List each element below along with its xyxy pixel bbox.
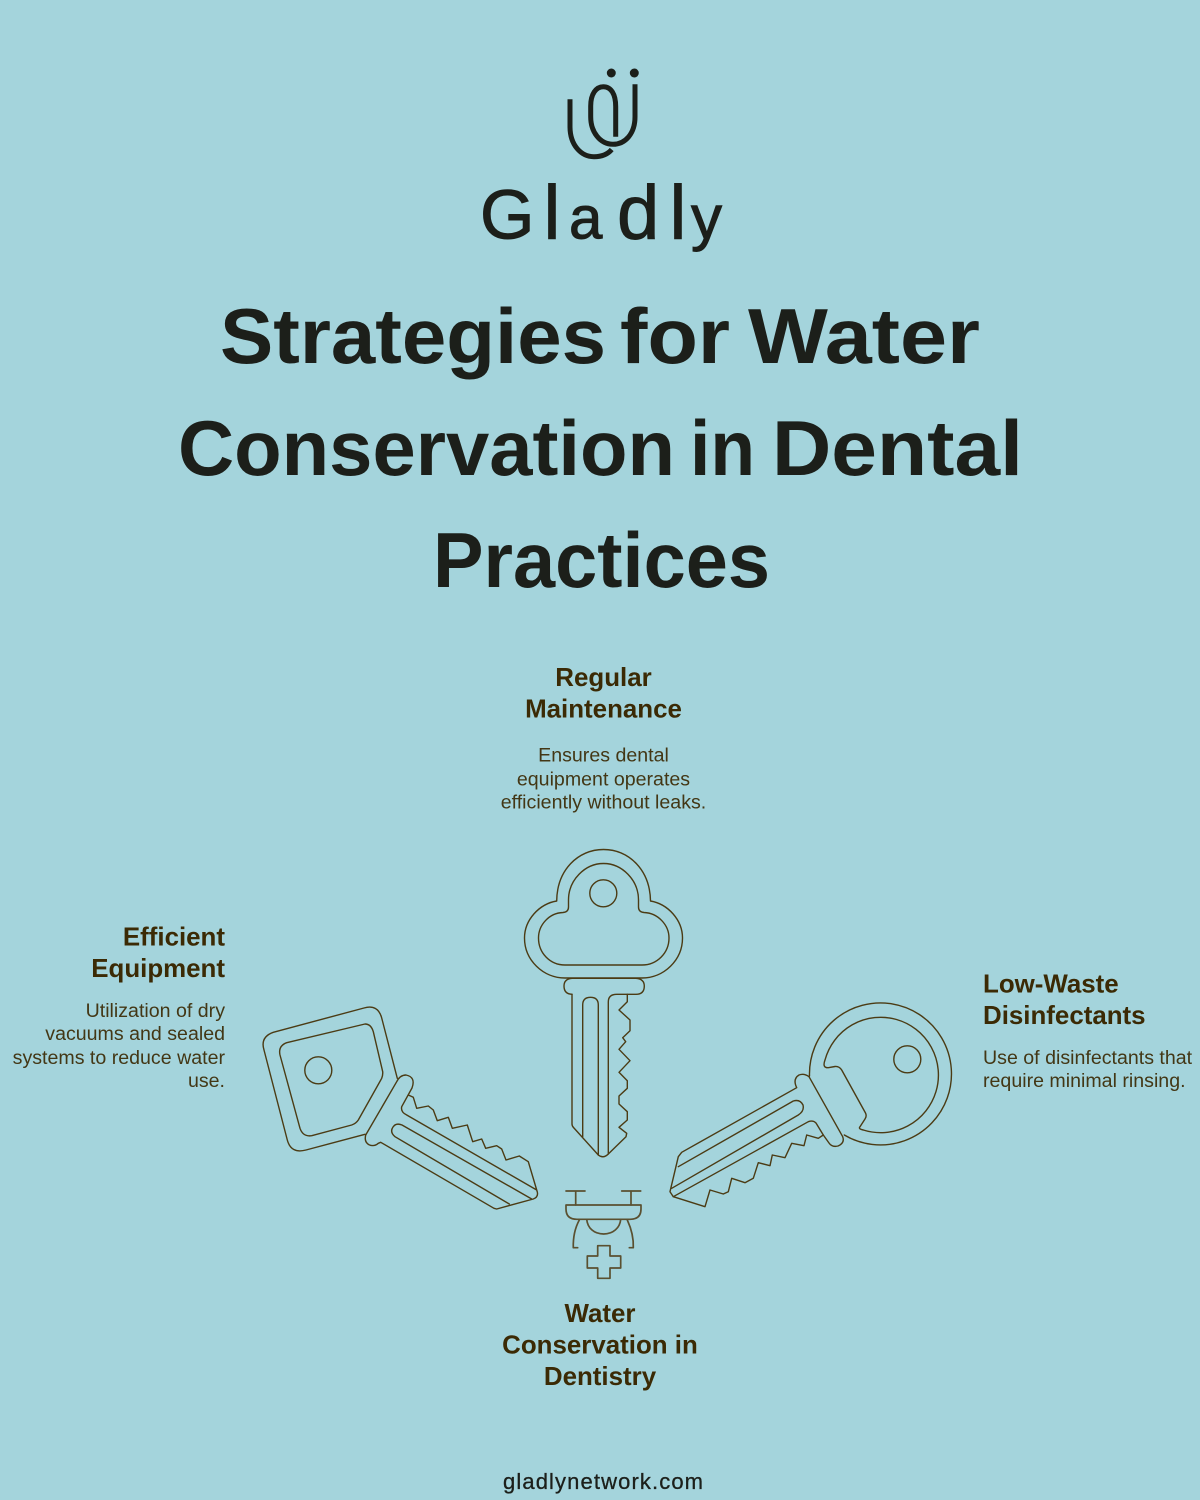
icon: Gladly paperclip mark xyxy=(570,68,639,157)
heading: Water Conservation in Dentistry: Water xyxy=(565,1300,635,1328)
description: Low-Waste Disinfectants xyxy=(983,1047,1193,1092)
heading: Efficient Equipment: Efficient xyxy=(123,924,225,952)
wordmark: Gladly: a xyxy=(569,184,603,252)
title: in xyxy=(690,404,755,492)
title: for xyxy=(620,292,730,380)
wordmark: Gladly: l xyxy=(544,170,560,256)
icon: left key xyxy=(263,1007,538,1209)
description: Efficient Equipment: vacuums and sealed xyxy=(45,1023,225,1045)
title: Conservation xyxy=(178,404,675,492)
heading: Water Conservation in Dentistry: Conservation in xyxy=(502,1332,698,1360)
description: Efficient Equipment xyxy=(13,1000,225,1092)
title xyxy=(178,292,1023,604)
text block: Efficient Equipment xyxy=(13,924,225,1092)
logo: Gladly mark and wordmark xyxy=(480,68,722,256)
wordmark: Gladly: G xyxy=(480,176,534,254)
heading: Efficient Equipment xyxy=(91,924,225,983)
heading: Low-Waste Disinfectants: Disinfectants xyxy=(983,1002,1146,1030)
text block: Regular Maintenance xyxy=(501,664,706,814)
title: Practices xyxy=(433,516,770,604)
wordmark: Gladly: l xyxy=(670,170,686,256)
heading: Regular Maintenance: Regular xyxy=(555,664,652,692)
heading: Water Conservation in Dentistry xyxy=(502,1300,698,1391)
icon: right key xyxy=(670,1003,951,1207)
heading: Efficient Equipment: Equipment xyxy=(91,955,225,983)
description: Low-Waste Disinfectants: Use of disinfectants that xyxy=(983,1047,1193,1069)
description: Efficient Equipment: systems to reduce water xyxy=(13,1047,225,1069)
description: Regular Maintenance: Ensures dental xyxy=(538,744,669,766)
description: Efficient Equipment: use. xyxy=(188,1070,225,1092)
footer URL: gladlynetwork.com xyxy=(503,1469,703,1494)
heading: Water Conservation in Dentistry: Dentistry xyxy=(544,1363,657,1391)
icon: center key xyxy=(524,850,682,1157)
icon: dental drone with cross xyxy=(566,1191,641,1278)
heading: Low-Waste Disinfectants: Low-Waste xyxy=(983,970,1119,998)
description: Regular Maintenance: equipment operates xyxy=(517,768,690,790)
wordmark: Gladly: d xyxy=(617,170,659,256)
description: Efficient Equipment: Utilization of dry xyxy=(86,1000,225,1022)
heading: Regular Maintenance: Maintenance xyxy=(525,696,682,724)
text block: Low-Waste Disinfectants xyxy=(983,970,1193,1092)
wordmark: Gladly: y xyxy=(691,184,722,252)
title: Dental xyxy=(772,404,1023,492)
heading: Regular Maintenance xyxy=(525,664,682,724)
description: Low-Waste Disinfectants: require minimal rinsing. xyxy=(983,1070,1186,1092)
description: Regular Maintenance: efficiently without leaks. xyxy=(501,792,706,814)
title: Water xyxy=(748,292,980,380)
title: Strategies xyxy=(220,292,606,380)
description: Regular Maintenance xyxy=(501,744,706,814)
heading: Low-Waste Disinfectants xyxy=(983,970,1146,1030)
